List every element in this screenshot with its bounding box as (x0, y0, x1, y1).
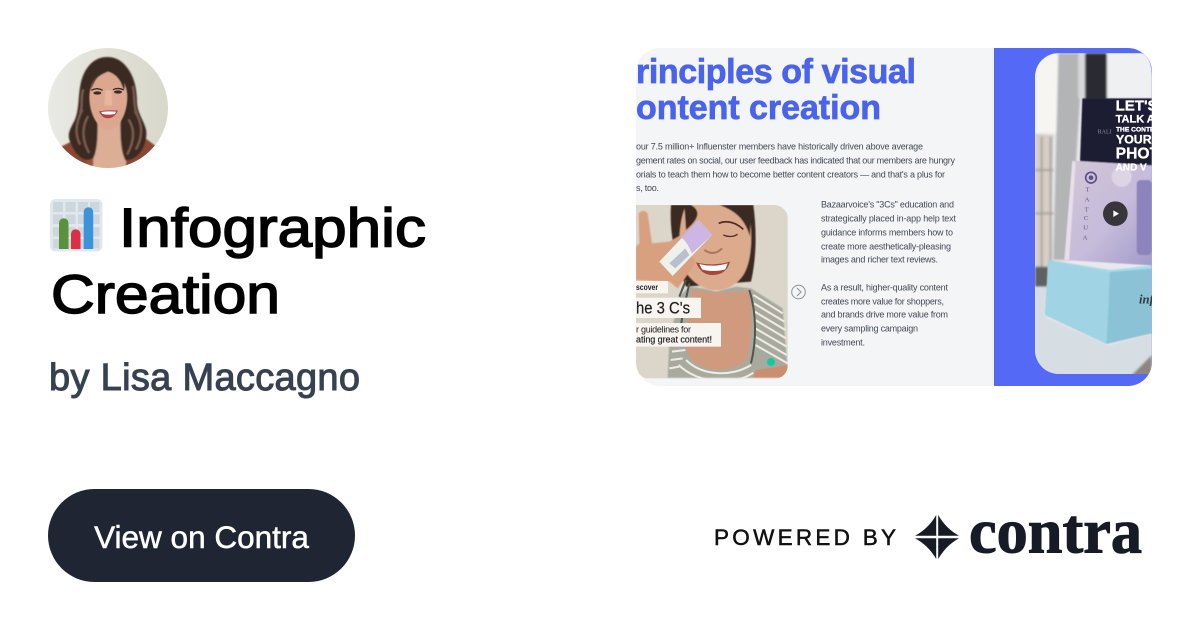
video: product boxes on windowsill: U (1083, 224, 1088, 231)
video: product boxes on windowsill: AND V (1116, 163, 1147, 174)
title: Infographic (119, 196, 426, 258)
text block: 3Cs explanation: every sampling campaign (821, 324, 918, 334)
powered by label: POWERED BY (714, 525, 896, 550)
icon: contra star (915, 515, 959, 559)
photo: woman holding product over eye (636, 205, 788, 381)
title (50, 196, 426, 325)
text block: 3Cs explanation: create more aesthetically-pleasing (821, 241, 951, 251)
video: product boxes on windowsill: RALI (1098, 129, 1112, 135)
title: Creation (51, 263, 280, 325)
button: View on Contra: View on Contra (94, 519, 309, 555)
text block: 3Cs explanation: Bazaarvoice's "3Cs" education and (821, 200, 954, 210)
video: product boxes on windowsill (1035, 53, 1152, 374)
video: product boxes on windowsill: T (1085, 207, 1089, 214)
text block: intro paragraph: orials to teach them how to become better content creators — and that's a plus for (636, 170, 945, 180)
text: photo captions: r guidelines for (636, 324, 691, 334)
panel: blue sidebar (994, 48, 1152, 386)
byline: by Lisa Maccagno (49, 357, 360, 399)
heading: principles of visual content creation: rinciples of visual (636, 53, 916, 91)
thumbnail: infographic preview (636, 48, 1152, 386)
text block: intro paragraph: s, too. (636, 183, 659, 193)
text block: intro paragraph: our 7.5 million+ Influenster members have historically driven above average (636, 142, 923, 152)
text block: 3Cs explanation: creates more value for shoppers, (821, 296, 944, 306)
text: photo captions: ating great content! (636, 334, 712, 344)
text block: 3Cs explanation: guidance informs members how to (821, 227, 953, 237)
heading: principles of visual content creation (637, 58, 914, 120)
logo: contra star and wordmark (915, 505, 1142, 566)
text block: 3Cs explanation: images and richer text reviews. (821, 255, 938, 265)
text block: 3Cs explanation: investment. (821, 338, 865, 348)
heading: principles of visual content creation: ontent creation (636, 89, 881, 127)
text block: 3Cs explanation: and brands drive more value from (821, 310, 948, 320)
text: photo captions (636, 282, 712, 344)
button: View on Contra (48, 489, 355, 582)
video: product boxes on windowsill: A (1085, 197, 1090, 204)
text block: intro paragraph (636, 142, 956, 193)
arrow: next circle (792, 285, 805, 299)
text block: 3Cs explanation: As a result, higher-quality content (821, 282, 948, 292)
text: photo captions: he 3 C's (636, 298, 690, 318)
video: product boxes on windowsill: T (1086, 187, 1090, 194)
text block: 3Cs explanation (821, 200, 956, 348)
text: photo captions: scover (636, 282, 659, 292)
video: product boxes on windowsill: YOUR (1116, 133, 1152, 147)
avatar: portrait of Lisa Maccagno (48, 48, 168, 168)
video: product boxes on windowsill: C (1084, 215, 1089, 222)
panel: article background (636, 48, 994, 386)
video: product boxes on windowsill: A (1083, 234, 1088, 241)
text block: intro paragraph: gement rates on social, our user feedback has indicated that our members are hungry (636, 156, 956, 166)
icon: bar chart emoji (50, 199, 102, 252)
text block: 3Cs explanation: strategically placed in-app help text (821, 214, 956, 224)
